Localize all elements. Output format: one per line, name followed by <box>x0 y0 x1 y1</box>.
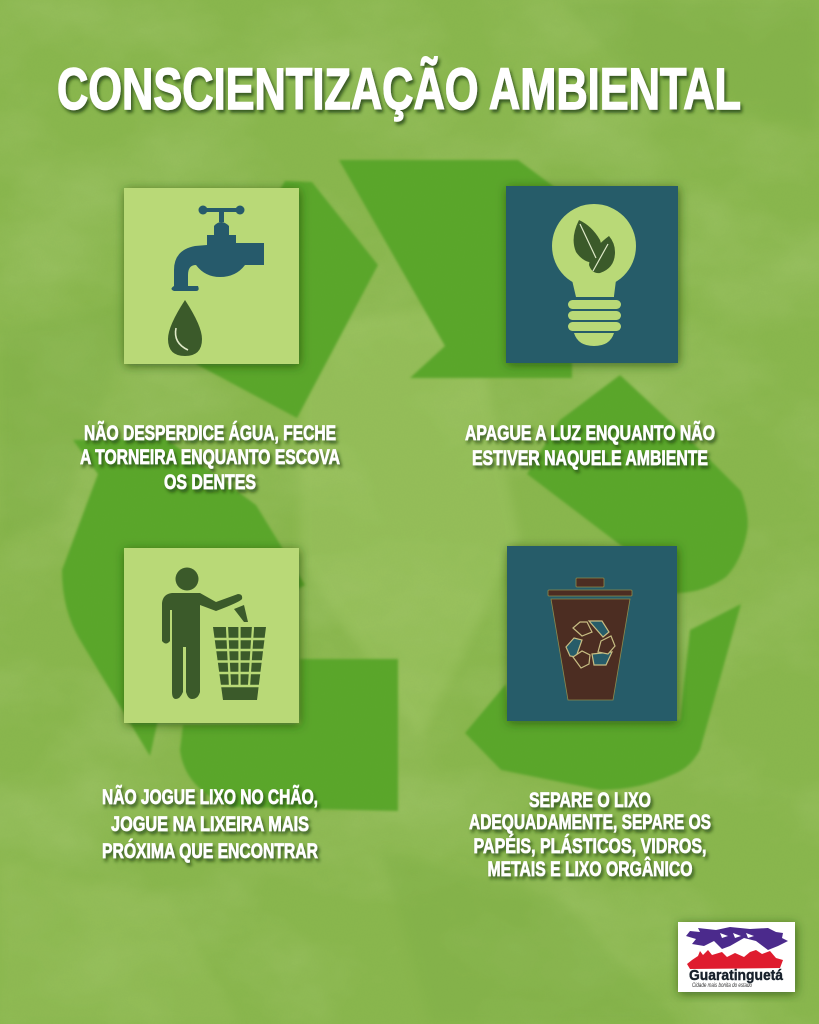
text: sorting tip: SEPARE O LIXO <box>529 789 651 812</box>
icon: brown bin <box>548 578 632 700</box>
logo wordmark: Guaratinguetá <box>689 967 784 984</box>
text: sorting tip <box>469 789 711 881</box>
text: water tip: OS DENTES <box>164 471 256 494</box>
text: light tip <box>465 422 715 470</box>
text: sorting tip: METAIS E LIXO ORGÂNICO <box>488 857 692 881</box>
arrow: bottom right head <box>465 604 741 790</box>
text: litter tip <box>102 786 318 863</box>
text: litter tip: JOGUE NA LIXEIRA MAIS <box>111 813 309 836</box>
panel: person and bin <box>124 548 299 723</box>
text: sorting tip: PAPÉIS, PLÁSTICOS, VIDROS, <box>474 835 706 858</box>
icon: leaves <box>574 220 615 273</box>
logo mountains <box>686 927 788 950</box>
logo: Guaratinguetá <box>678 922 795 992</box>
text: sorting tip: ADEQUADAMENTE, SEPARE OS <box>469 811 711 834</box>
text: water tip <box>80 422 340 494</box>
arrow: top left head <box>196 181 378 418</box>
logo tagline: Cidade mais bonita do estado <box>692 983 752 989</box>
text: water tip: A TORNEIRA ENQUANTO ESCOVA <box>80 446 340 469</box>
icon: bulb <box>552 204 636 346</box>
arrow: right band <box>527 375 748 596</box>
recycling symbol behind the panels <box>62 160 748 811</box>
icon: water drop <box>168 300 202 356</box>
icon: person littering <box>162 568 248 699</box>
icon: tap <box>172 206 264 291</box>
logo birds <box>720 933 754 938</box>
panel: water tap <box>124 188 299 364</box>
panel: recycling bin <box>507 546 677 721</box>
text: light tip: APAGUE A LUZ ENQUANTO NÃO <box>465 422 715 445</box>
arrow: bottom band <box>180 659 398 811</box>
text: litter tip: NÃO JOGUE LIXO NO CHÃO, <box>102 786 318 809</box>
text: water tip: NÃO DESPERDICE ÁGUA, FECHE <box>84 422 336 445</box>
text: light tip: ESTIVER NAQUELE AMBIENTE <box>472 447 708 470</box>
arrow: left band <box>62 438 305 756</box>
logo skyline <box>687 950 783 969</box>
text: litter tip: PRÓXIMA QUE ENCONTRAR <box>102 839 318 863</box>
icon: wire bin <box>213 627 266 700</box>
panel: light bulb <box>506 186 678 363</box>
icon: recycling arrows <box>566 621 615 668</box>
arrow: top band <box>339 160 572 378</box>
